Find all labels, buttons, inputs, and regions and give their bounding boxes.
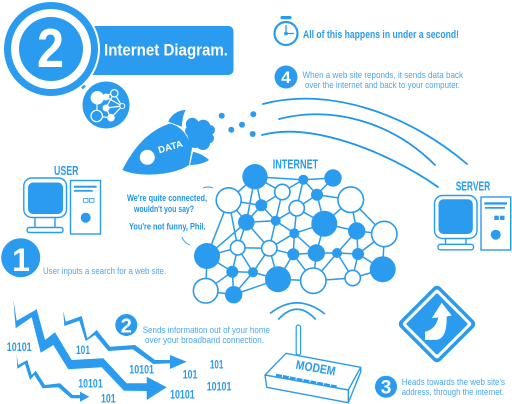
binary labels: 10101 (7, 340, 32, 354)
binary labels: 10101 (129, 362, 154, 376)
modem lights (276, 375, 337, 387)
step 2 badge (2, 0, 100, 98)
title bar: Internet Diagram. (104, 42, 228, 60)
server label: SERVER (456, 180, 490, 194)
binary labels (7, 340, 232, 404)
step 4 text: When a web site reponds, it sends data back (302, 70, 463, 81)
step 4 text: over the internet and back to your computer. (305, 80, 460, 91)
hollow nodes (193, 184, 397, 303)
icon: data rocket: DATA (157, 139, 184, 156)
step 2 small badge (115, 314, 137, 338)
title bar (88, 26, 234, 75)
binary labels: 10101 (78, 377, 103, 391)
step 3 badge (375, 376, 397, 399)
binary labels: 101 (210, 358, 224, 372)
speech bubble text: We're quite connected, (127, 193, 207, 203)
internet label: INTERNET (273, 158, 318, 172)
step 4 text (302, 70, 463, 91)
filled nodes (194, 164, 396, 303)
step 2 badge: 2 (37, 17, 64, 79)
modem label: MODEM (295, 358, 337, 378)
step 3 text (402, 377, 505, 398)
step 2 text: Sends information out of your home (143, 325, 270, 336)
speech bubble text (127, 187, 213, 245)
binary labels: 101 (183, 367, 198, 381)
step 4 badge: 4 (281, 68, 291, 87)
icon: modem (265, 303, 361, 403)
icon: user computer (24, 178, 100, 234)
lightning arrows (13, 299, 187, 402)
speech bubble text: You're not funny, Phil. (129, 222, 206, 232)
title block (2, 0, 234, 98)
step 2 small badge: 2 (121, 316, 132, 338)
network diagram (193, 164, 397, 303)
binary labels: 10101 (170, 387, 195, 401)
heading: timing note: All of this happens in under a second! (303, 29, 459, 41)
return arcs (262, 99, 467, 187)
icon: server computer (434, 196, 511, 250)
user label: USER (54, 164, 78, 178)
icon: road sign (397, 284, 477, 364)
step 3 badge: 3 (381, 378, 391, 399)
step 1 badge: 1 (12, 242, 30, 278)
step 1 badge (1, 238, 40, 278)
modem body (265, 353, 361, 403)
connection lines (206, 177, 384, 295)
icon: small network (82, 82, 130, 128)
upper data arrow (63, 311, 187, 369)
modem wifi waves (270, 303, 325, 320)
modem antenna (296, 325, 301, 355)
binary labels: 10101 (207, 380, 232, 394)
icon: data rocket (122, 110, 256, 175)
binary labels: 101 (76, 343, 90, 357)
big data arrow (13, 299, 167, 400)
step 4 badge (274, 66, 298, 88)
lower data arrow (17, 355, 89, 402)
step 2 text: over your broadband connection. (145, 335, 264, 346)
icon: stopwatch (274, 16, 298, 45)
step 1 text: User inputs a search for a web site. (43, 266, 166, 277)
speech bubble text: wouldn't you say? (133, 204, 194, 214)
step 2 text (143, 325, 270, 346)
